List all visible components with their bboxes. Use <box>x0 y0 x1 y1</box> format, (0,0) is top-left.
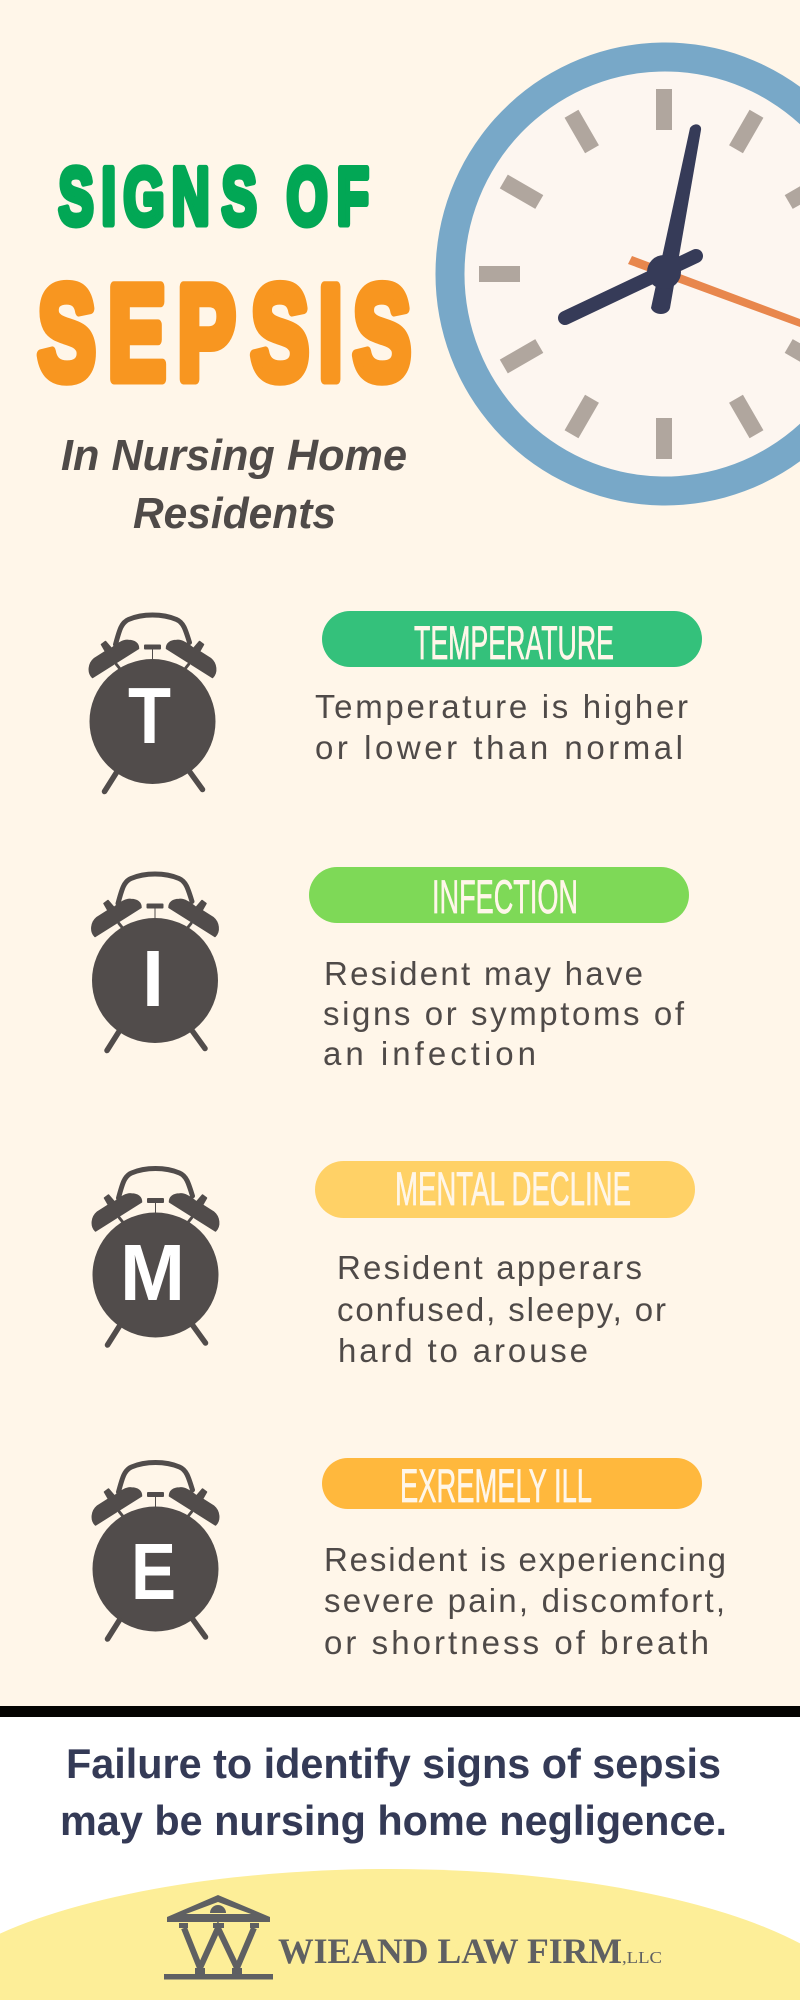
title block <box>38 152 411 538</box>
clock face <box>464 72 800 477</box>
description: infection: signs or symptoms of <box>323 995 685 1032</box>
description: extremely ill <box>324 1541 726 1661</box>
description: infection: Resident may have <box>324 955 643 992</box>
pill heading: temperature <box>322 611 702 669</box>
letter I: I <box>142 934 164 1023</box>
item: mental decline <box>92 1161 695 1369</box>
subtitle <box>61 431 407 538</box>
letter M: M <box>120 1228 185 1317</box>
description: extremely ill: Resident is experiencing <box>324 1541 726 1578</box>
icon: alarm clock E <box>92 1462 219 1639</box>
description: temperature: Temperature is higher <box>315 688 688 725</box>
description: mental decline: Resident apperars <box>337 1249 642 1286</box>
description: infection <box>323 955 685 1072</box>
icon: wall clock <box>435 43 800 505</box>
hour hand <box>565 256 696 318</box>
icon: alarm clock M <box>92 1168 219 1345</box>
item: extremely ill <box>92 1458 726 1661</box>
description: extremely ill: or shortness of breath <box>324 1624 709 1661</box>
letter E: E <box>131 1527 176 1616</box>
icon: temple W <box>164 1895 273 1980</box>
minute hand <box>651 124 701 314</box>
description: temperature <box>315 688 688 766</box>
pill heading: mental decline <box>315 1161 695 1218</box>
panel: white footer <box>0 1717 800 2000</box>
clock ticks <box>479 89 800 459</box>
icon: alarm clock T <box>89 615 216 792</box>
subtitle: Residents <box>133 489 336 538</box>
pill heading: temperature: TEMPERATURE <box>414 616 614 669</box>
letter T: T <box>128 671 171 760</box>
callout: negligence statement: Failure to identify signs of sepsis <box>66 1740 721 1787</box>
description: extremely ill: severe pain, discomfort, <box>324 1582 725 1619</box>
pill heading: infection <box>309 867 689 923</box>
wordmark suffix: ,LLC <box>622 1948 662 1967</box>
logo: Wieand Law Firm <box>164 1895 662 1980</box>
description: infection: an infection <box>323 1035 536 1072</box>
wordmark: WIEAND LAW FIRM <box>278 1931 622 1971</box>
callout: negligence statement <box>60 1740 727 1844</box>
item: temperature <box>89 611 702 792</box>
title: signs of: SIGNS OF <box>59 152 369 242</box>
description: temperature: or lower than normal <box>315 729 683 766</box>
description: mental decline: hard to arouse <box>338 1332 588 1369</box>
description: mental decline <box>337 1249 666 1369</box>
clock ring <box>435 43 800 505</box>
yellow footer arc <box>0 1869 800 2000</box>
item: infection <box>92 867 689 1072</box>
subtitle: In Nursing Home <box>61 431 407 480</box>
pill heading: infection: INFECTION <box>432 870 578 923</box>
pill heading: mental decline: MENTAL DECLINE <box>395 1162 631 1215</box>
callout: negligence statement: may be nursing home negligence. <box>60 1797 727 1844</box>
description: mental decline: confused, sleepy, or <box>337 1291 666 1328</box>
icon: alarm clock I <box>92 874 218 1050</box>
clock hub <box>647 255 681 289</box>
second hand <box>628 256 800 327</box>
title: sepsis: SEPSIS <box>38 258 411 407</box>
pill heading: extremely ill: EXREMELY ILL <box>400 1459 592 1512</box>
black divider band <box>0 1706 800 1717</box>
